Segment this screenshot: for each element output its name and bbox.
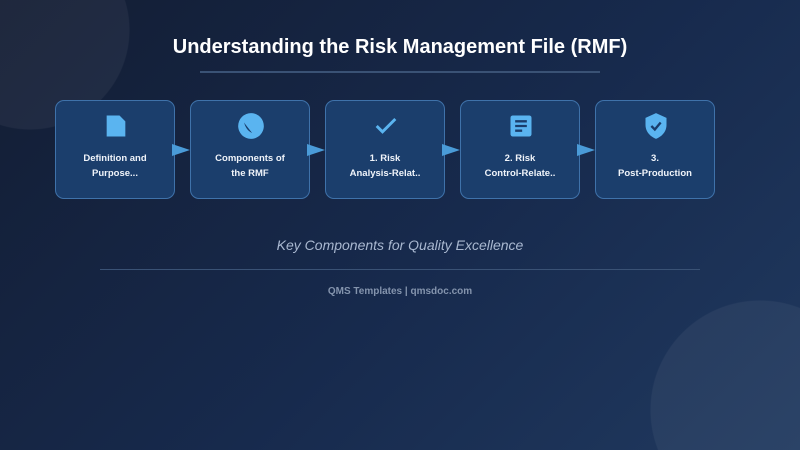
step 1: Purpose... [92,168,138,179]
step 4: Control-Relate.. [485,168,555,179]
step 4 [460,100,580,199]
step 5 [595,100,715,199]
icon: document [106,116,126,136]
arrow 3 [442,144,460,156]
arrow 1 [172,144,190,156]
step 2: the RMF [231,168,269,179]
step 5: 3. [651,153,659,164]
step 3 [325,100,445,199]
step 2 [190,100,310,199]
icon: circle [238,113,264,139]
icon: list document [510,116,532,136]
step 1: Definition and [83,153,147,164]
icon: check [376,118,396,134]
step 5: Post-Production [618,168,692,179]
step 3: 1. Risk [370,153,400,164]
arrow 2 [307,144,325,156]
step 3: Analysis-Relat.. [350,168,420,179]
footer: QMS Templates | qmsdoc.com [328,286,472,297]
title: Understanding the Risk Management File (RMF) [173,36,627,58]
step 1 [55,100,175,199]
arrow 4 [577,144,595,156]
subtitle: Key Components for Quality Excellence [277,237,523,253]
step 2: Components of [215,153,285,164]
step 4: 2. Risk [505,153,535,164]
icon: shield [646,113,666,139]
